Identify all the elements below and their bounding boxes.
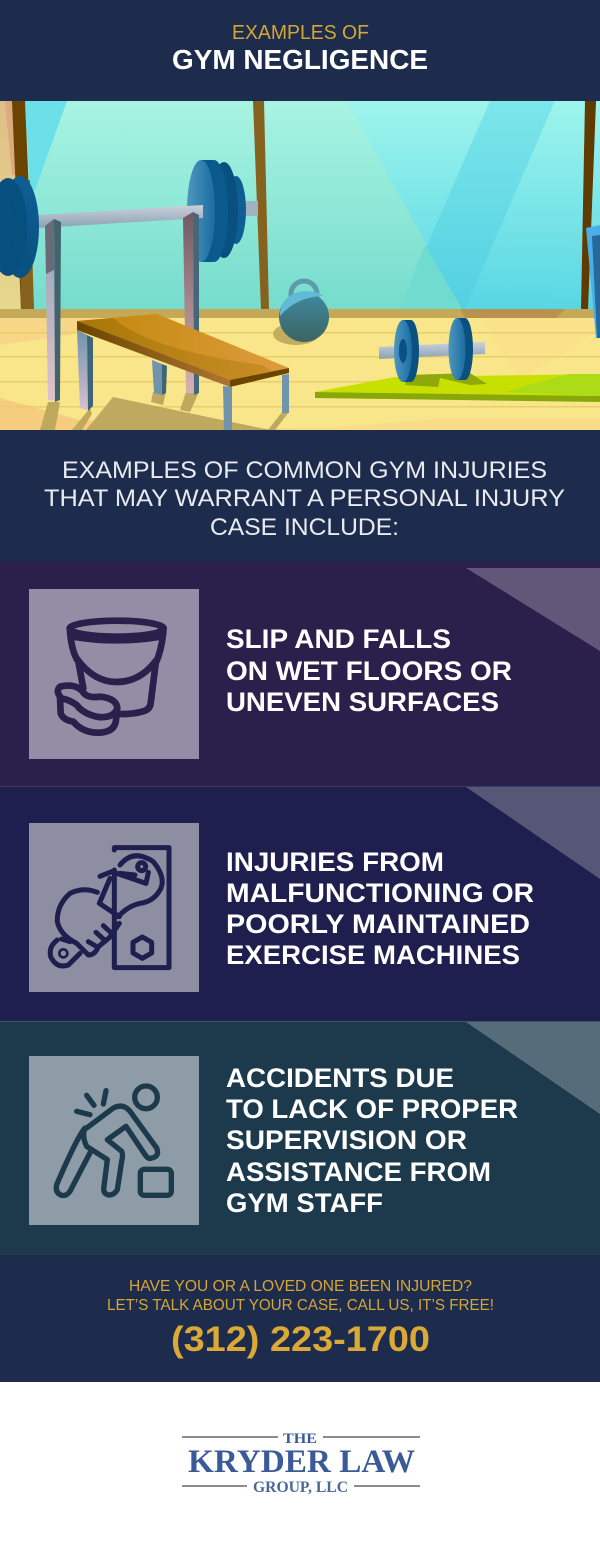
- panel: lack of supervision: [0, 1021, 600, 1255]
- icon: injured person lifting: [56, 1086, 171, 1195]
- right weight plates: [187, 160, 258, 262]
- intro band: [0, 430, 600, 562]
- rear post: [183, 212, 199, 395]
- intro text: THAT MAY WARRANT A PERSONAL INJURY: [44, 485, 565, 512]
- panel heading: ON WET FLOORS OR: [226, 656, 512, 686]
- phone number: (312) 223-1700: [171, 1320, 430, 1359]
- panel heading: GYM STAFF: [226, 1188, 383, 1218]
- logo: The Kryder Law Group, LLC: [182, 1431, 420, 1496]
- exercise mat: [315, 373, 600, 402]
- bar: [38, 205, 203, 228]
- panel heading: MALFUNCTIONING OR: [226, 878, 534, 908]
- gym illustration: [0, 101, 600, 430]
- panel heading: INJURIES FROM: [226, 847, 444, 877]
- dumbbell: [379, 318, 485, 382]
- title: GYM NEGLIGENCE: [172, 44, 428, 75]
- panel heading: POORLY MAINTAINED: [226, 909, 530, 939]
- panel: exercise machines: [0, 786, 600, 1021]
- panel heading: [226, 847, 534, 970]
- panel heading: [226, 624, 512, 717]
- logo: The Kryder Law Group, LLC: GROUP, LLC: [253, 1479, 348, 1496]
- front post: [45, 219, 61, 402]
- intro text: CASE INCLUDE:: [210, 514, 399, 541]
- bench: [77, 314, 289, 430]
- call to action text: HAVE YOU OR A LOVED ONE BEEN INJURED?: [129, 1278, 472, 1295]
- wall pillars: [12, 101, 596, 310]
- panel heading: TO LACK OF PROPER: [226, 1094, 518, 1124]
- panel heading: SUPERVISION OR: [226, 1125, 467, 1155]
- panel heading: SLIP AND FALLS: [226, 624, 451, 654]
- panel heading: ACCIDENTS DUE: [226, 1063, 454, 1093]
- intro text: [44, 457, 565, 541]
- icon: wrench and hand: [50, 848, 169, 968]
- panel heading: ASSISTANCE FROM: [226, 1157, 491, 1187]
- panel heading: [226, 1063, 518, 1218]
- call to action band: [0, 1255, 600, 1382]
- panel: slip and falls: [0, 561, 600, 786]
- logo: The Kryder Law Group, LLC: THE: [283, 1431, 317, 1447]
- kettlebell: [273, 281, 329, 345]
- logo: The Kryder Law Group, LLC: KRYDER LAW: [188, 1444, 415, 1480]
- panel heading: UNEVEN SURFACES: [226, 687, 499, 717]
- header kicker: EXAMPLES OF: [232, 22, 369, 44]
- panel heading: EXERCISE MACHINES: [226, 940, 520, 970]
- header band: [0, 0, 600, 101]
- blue wall frame: [586, 225, 600, 338]
- floor: [0, 309, 600, 430]
- intro text: EXAMPLES OF COMMON GYM INJURIES: [62, 457, 547, 484]
- floor shadows: [40, 392, 289, 430]
- bench press rack: [0, 160, 258, 402]
- footer background: [0, 1382, 600, 1548]
- call to action text: [107, 1278, 494, 1314]
- icon: bucket and sponge: [58, 621, 164, 733]
- left weight plates: [0, 176, 39, 278]
- call to action text: LET’S TALK ABOUT YOUR CASE, CALL US, IT’S FREE!: [107, 1297, 494, 1314]
